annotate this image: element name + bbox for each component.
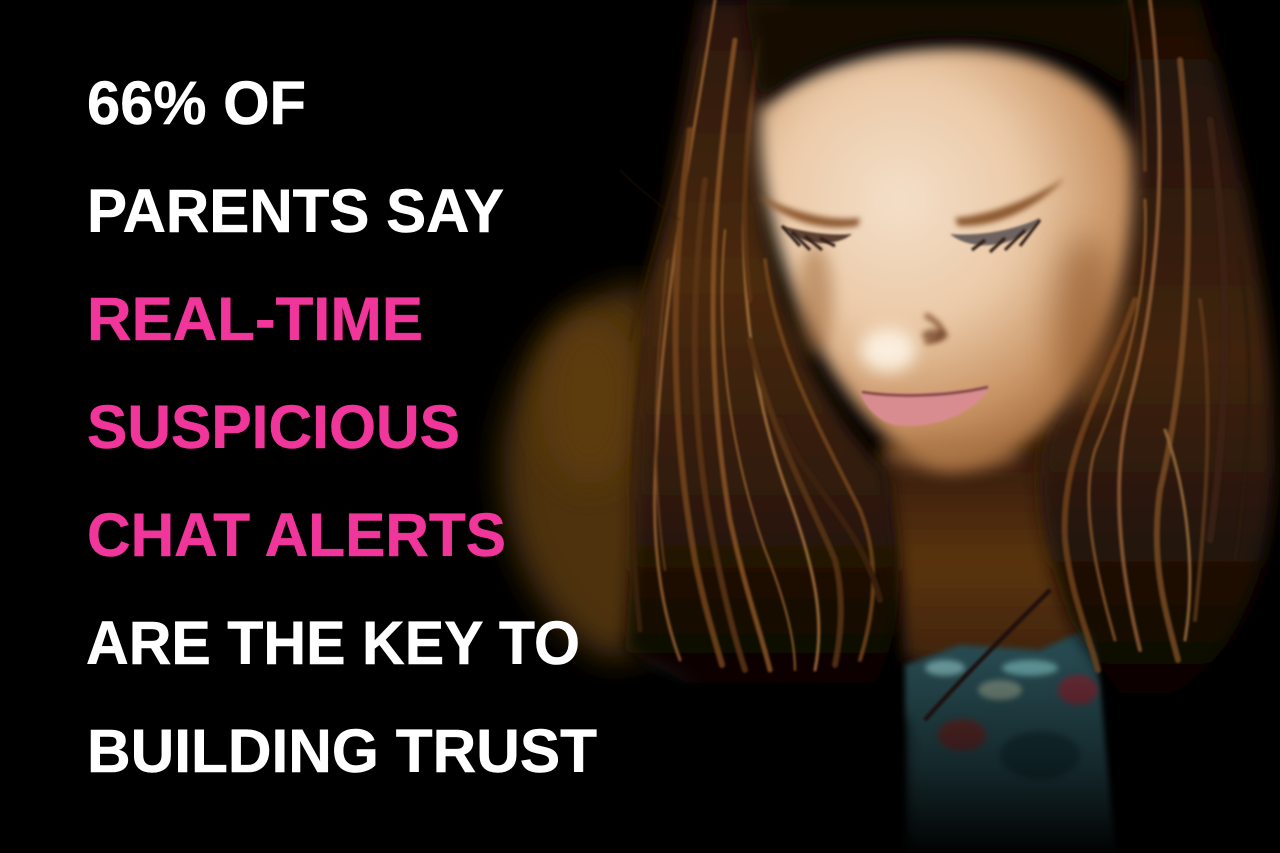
hair: right side [1040,0,1275,710]
eye right [950,218,1040,252]
headline line 3: REAL-TIME [87,285,423,353]
phone silhouette [560,690,905,853]
headline [86,69,597,785]
far-left shirt hint [640,590,700,680]
headline line 1: 66% OF [87,69,306,137]
face [745,0,1133,471]
headline line 5: CHAT ALERTS [87,501,506,569]
nose [860,315,948,372]
headline line 4: SUSPICIOUS [87,393,460,461]
headline line 6: ARE THE KEY TO [86,609,580,677]
shoulder [502,285,680,660]
hair: left side [620,0,899,690]
headline line 7: BUILDING TRUST [87,717,597,785]
eye left [782,226,852,250]
neck and chest [880,420,1090,680]
headline line 2: PARENTS SAY [87,177,504,245]
necklace cord [925,590,1050,720]
eyebrows [757,195,860,228]
shirt [895,625,1125,853]
lips [860,386,990,426]
photo: girl looking down at a glowing phone [502,0,1275,853]
forehead hairline [745,0,1130,100]
